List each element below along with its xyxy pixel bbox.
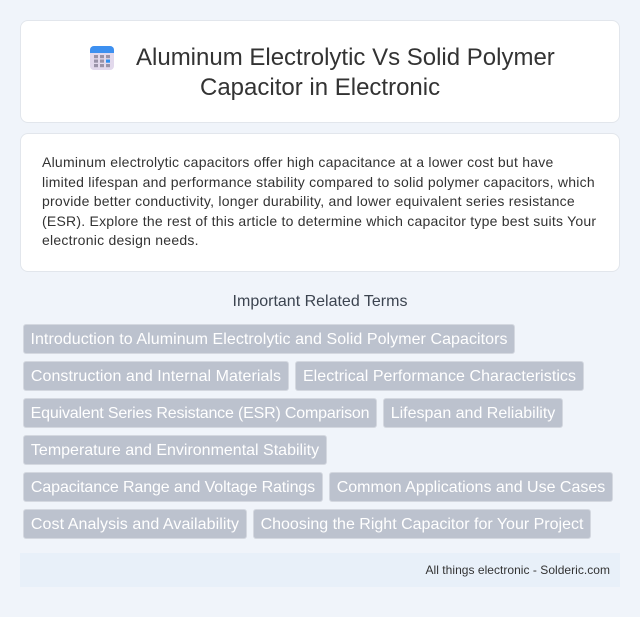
title — [136, 44, 555, 101]
tag: Equivalent Series Resistance (ESR) Comparison — [31, 405, 369, 422]
tag: Capacitance Range and Voltage Ratings — [31, 479, 315, 496]
title: Aluminum Electrolytic Vs Solid Polymer — [136, 44, 555, 71]
tag — [23, 472, 323, 502]
icon: calendar — [90, 46, 114, 70]
heading: important related terms: Important Related Terms — [233, 293, 407, 310]
text block: intro: provide better conductivity, longer durability, and lower equivalent series resistance — [42, 193, 575, 209]
text block: intro — [42, 154, 596, 248]
tag — [23, 361, 289, 391]
tag — [23, 324, 515, 354]
panel: intro text — [20, 133, 620, 272]
text block: intro: limited lifespan and performance stability compared to solid polymer capacitors, which — [42, 174, 595, 190]
tag: Common Applications and Use Cases — [337, 479, 605, 496]
panel: title card — [20, 20, 620, 123]
panel: related term tags — [23, 324, 613, 539]
tag: Electrical Performance Characteristics — [303, 368, 576, 385]
tag: Lifespan and Reliability — [391, 405, 555, 422]
tag — [383, 398, 563, 428]
tag: Cost Analysis and Availability — [31, 516, 239, 533]
text block: intro: Aluminum electrolytic capacitors offer high capacitance at a lower cost but have — [42, 154, 554, 170]
tag — [253, 509, 591, 539]
tag: Choosing the Right Capacitor for Your Project — [261, 516, 583, 533]
tag — [23, 398, 377, 428]
tag — [295, 361, 584, 391]
tag — [23, 435, 327, 465]
tag: Construction and Internal Materials — [31, 368, 281, 385]
tag — [23, 509, 247, 539]
tag: Temperature and Environmental Stability — [31, 442, 319, 459]
text block: intro: electronic design needs. — [42, 232, 199, 248]
tag: Introduction to Aluminum Electrolytic and Solid Polymer Capacitors — [30, 331, 508, 348]
footer — [20, 553, 620, 587]
title: Capacitor in Electronic — [200, 74, 440, 101]
text block: intro: (ESR). Explore the rest of this article to determine which capacitor type best suits Your — [42, 213, 596, 229]
footer text: All things electronic - Solderic.com — [426, 563, 610, 577]
tag — [329, 472, 613, 502]
